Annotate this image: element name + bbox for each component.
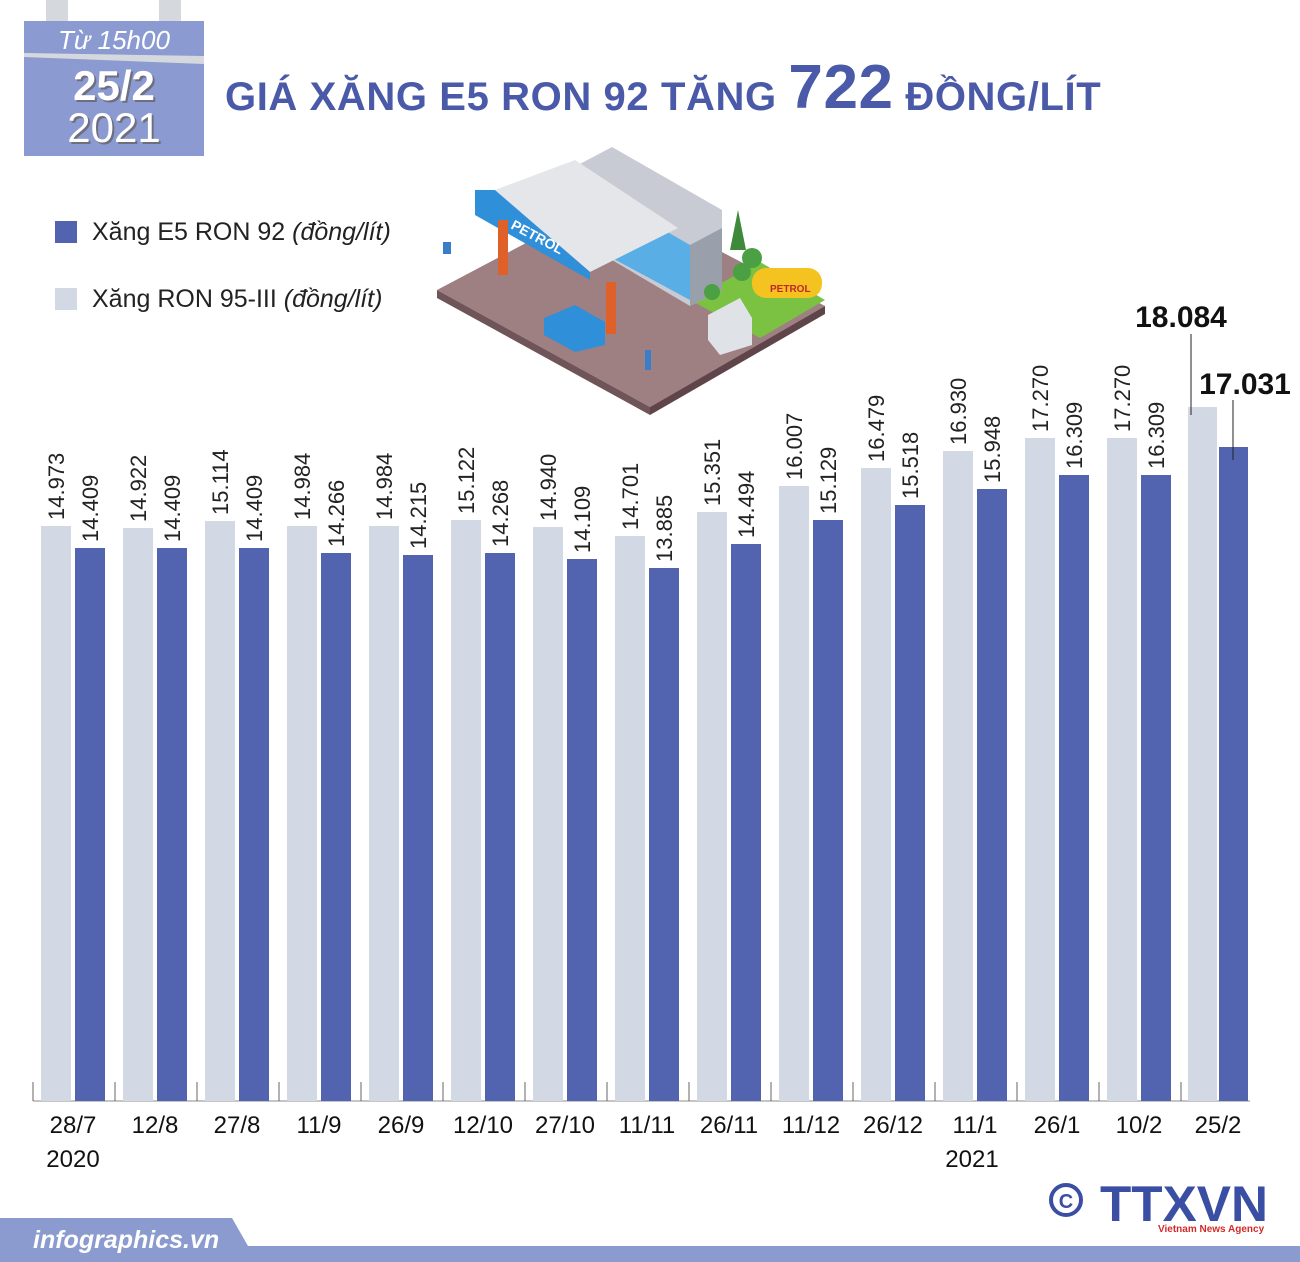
highlighted latest values: 17.031 (1199, 368, 1291, 401)
value labels: 14.940 (536, 454, 561, 521)
x-axis date labels: 12/10 (453, 1112, 513, 1139)
logo: TTXVN: C (1059, 1191, 1073, 1213)
x-axis date labels: 26/12 (863, 1112, 923, 1139)
legend: Xăng E5 RON 92 (đồng/lít) (92, 218, 391, 246)
x-axis date labels: 27/10 (535, 1112, 595, 1139)
x-axis date labels: 28/7 (50, 1112, 96, 1139)
value labels: 14.215 (406, 482, 431, 549)
x-axis date labels: 2020 (46, 1146, 100, 1173)
x-axis date labels: 26/1 (1034, 1112, 1080, 1139)
x-axis date labels: 26/9 (378, 1112, 424, 1139)
x-axis date labels: 25/2 (1195, 1112, 1241, 1139)
highlighted latest values (1135, 301, 1291, 460)
x-axis date labels: 11/12 (782, 1112, 840, 1139)
value labels: 14.409 (242, 475, 267, 542)
value labels: 16.930 (946, 378, 971, 445)
highlighted latest values: 18.084 (1135, 301, 1227, 334)
x-axis date labels: 11/9 (297, 1112, 341, 1139)
title: 722 (788, 53, 894, 122)
value labels: 17.270 (1028, 365, 1053, 432)
logo: TTXVN: Vietnam News Agency (1158, 1224, 1265, 1235)
value labels: 14.984 (372, 453, 397, 520)
x-axis date labels (46, 1112, 1241, 1173)
value labels: 16.479 (864, 395, 889, 462)
value labels: 16.309 (1062, 402, 1087, 469)
value labels: 14.973 (44, 453, 69, 520)
legend: Xăng RON 95-III (đồng/lít) (92, 285, 382, 313)
value labels: 13.885 (652, 495, 677, 562)
value labels: 14.701 (618, 463, 643, 530)
x-axis date labels: 11/11 (619, 1112, 675, 1139)
calendar badge: 2021 (67, 104, 161, 151)
value labels: 17.270 (1110, 365, 1135, 432)
illustration: petrol station: PETROL (770, 284, 811, 295)
calendar badge: 2021 (69, 106, 163, 153)
value labels (44, 365, 1169, 562)
footer band (0, 1218, 1300, 1262)
value labels: 15.948 (980, 416, 1005, 483)
title: ĐỒNG/LÍT (894, 73, 1101, 119)
calendar badge: Từ 15h00 (58, 25, 170, 55)
x-axis date labels: 2021 (945, 1146, 999, 1173)
value labels: 14.109 (570, 486, 595, 553)
value labels: 14.266 (324, 480, 349, 547)
calendar badge: 25/2 (75, 64, 157, 111)
value labels: 14.268 (488, 480, 513, 547)
x-axis date labels: 10/2 (1116, 1112, 1162, 1139)
footer band: infographics.vn (33, 1226, 219, 1254)
title: GIÁ XĂNG E5 RON 92 TĂNG (225, 75, 777, 119)
value labels: 15.129 (816, 447, 841, 514)
calendar badge: 25/2 (73, 62, 155, 109)
bar chart (33, 301, 1291, 1173)
value labels: 16.309 (1144, 402, 1169, 469)
legend (55, 218, 391, 313)
value labels: 15.114 (208, 449, 233, 515)
value labels: 14.922 (126, 455, 151, 522)
illustration: petrol station: PETROL (509, 217, 567, 258)
calendar badge (24, 0, 204, 156)
illustration: petrol station (437, 147, 825, 415)
x-axis date labels: 26/11 (700, 1112, 758, 1139)
logo: TTXVN: TTXVN (1100, 1176, 1268, 1232)
value labels: 14.409 (78, 475, 103, 542)
value labels: 16.007 (782, 413, 807, 480)
value labels: 14.984 (290, 453, 315, 520)
x-axis date labels: 11/1 (953, 1112, 997, 1139)
value labels: 15.518 (898, 432, 923, 499)
x-axis date labels: 27/8 (214, 1112, 260, 1139)
value labels: 15.122 (454, 447, 479, 514)
value labels: 15.351 (700, 439, 725, 506)
x-axis date labels: 12/8 (132, 1112, 178, 1139)
value labels: 14.409 (160, 475, 185, 542)
value labels: 14.494 (734, 471, 759, 538)
title (225, 53, 1101, 122)
